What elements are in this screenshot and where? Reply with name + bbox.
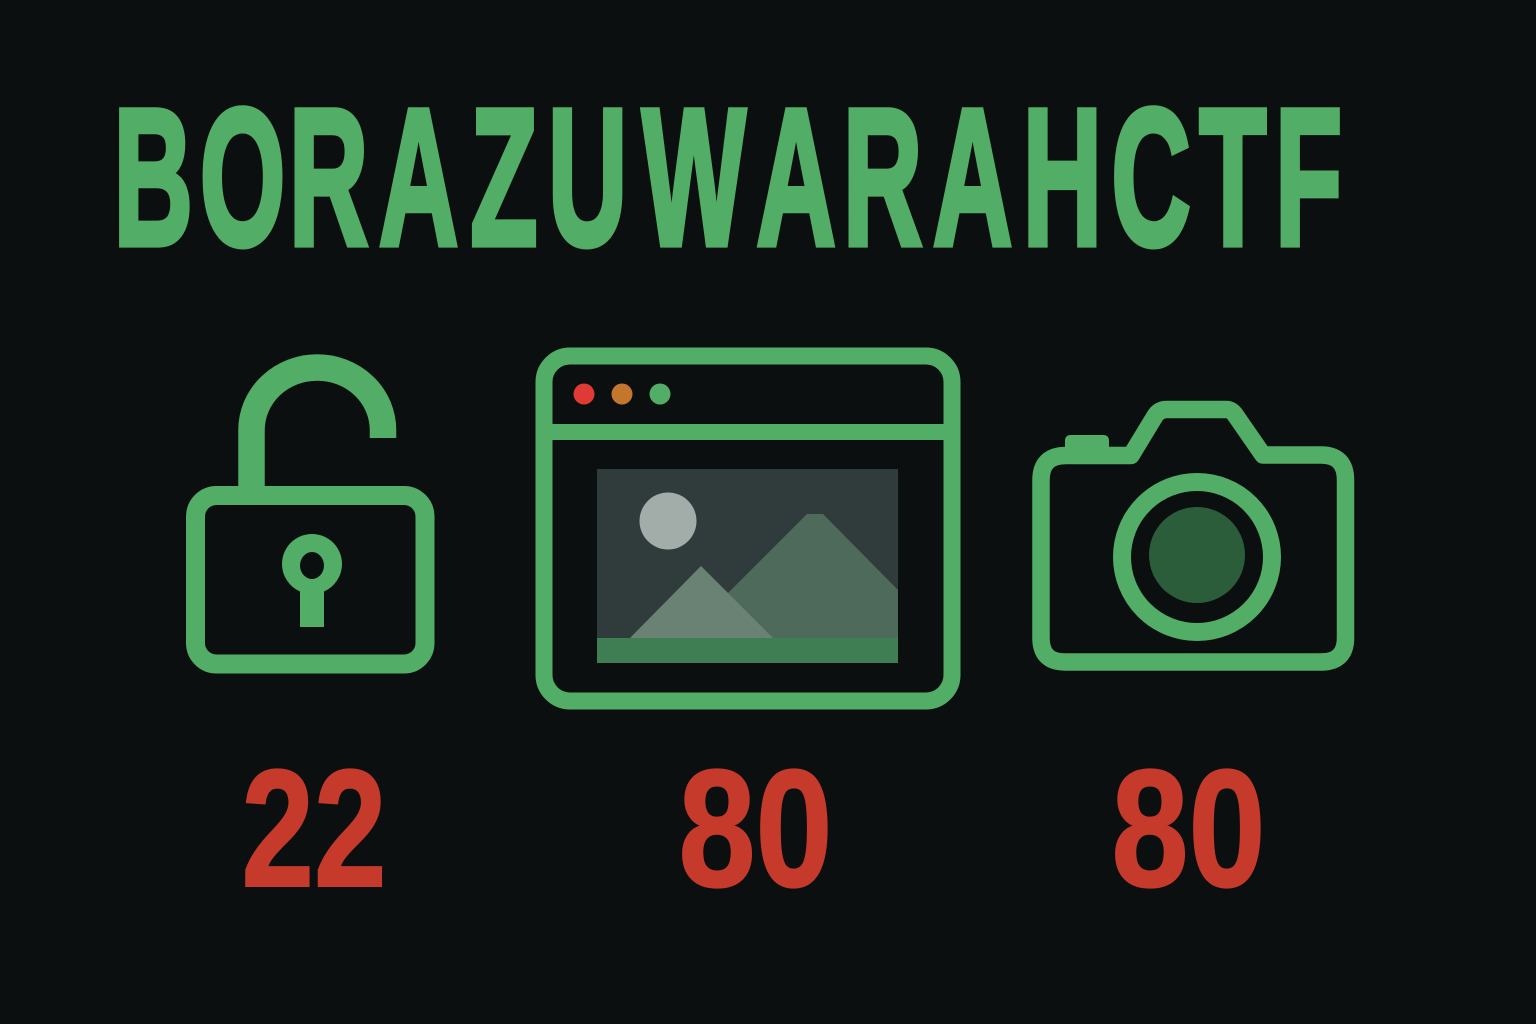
- number: 80 centre: 80: [678, 736, 832, 922]
- large mountain: [725, 514, 898, 640]
- camera shutter button: [1065, 435, 1109, 457]
- title: BORAZUWARAHCTF: [113, 68, 1342, 286]
- number: 80 right: 80: [1112, 736, 1266, 922]
- image placeholder: [597, 469, 898, 663]
- small mountain: [630, 566, 773, 638]
- lock body: [196, 496, 425, 664]
- number: 22: 22: [242, 736, 386, 922]
- window control: red: [574, 384, 594, 404]
- browser frame: [544, 356, 952, 701]
- icon: open padlock: [196, 368, 425, 664]
- browser title bar divider: [544, 424, 952, 440]
- camera body: [1041, 410, 1346, 662]
- moon: [640, 492, 696, 550]
- camera lens: [1149, 507, 1245, 603]
- ground: [597, 638, 898, 663]
- icon: browser window: [544, 356, 952, 701]
- window control: orange: [612, 384, 632, 404]
- keyhole: [282, 534, 342, 627]
- icon: camera: [1041, 410, 1346, 662]
- window control: green: [650, 384, 670, 404]
- camera lens ring: [1122, 482, 1272, 632]
- lock shackle: [252, 368, 383, 490]
